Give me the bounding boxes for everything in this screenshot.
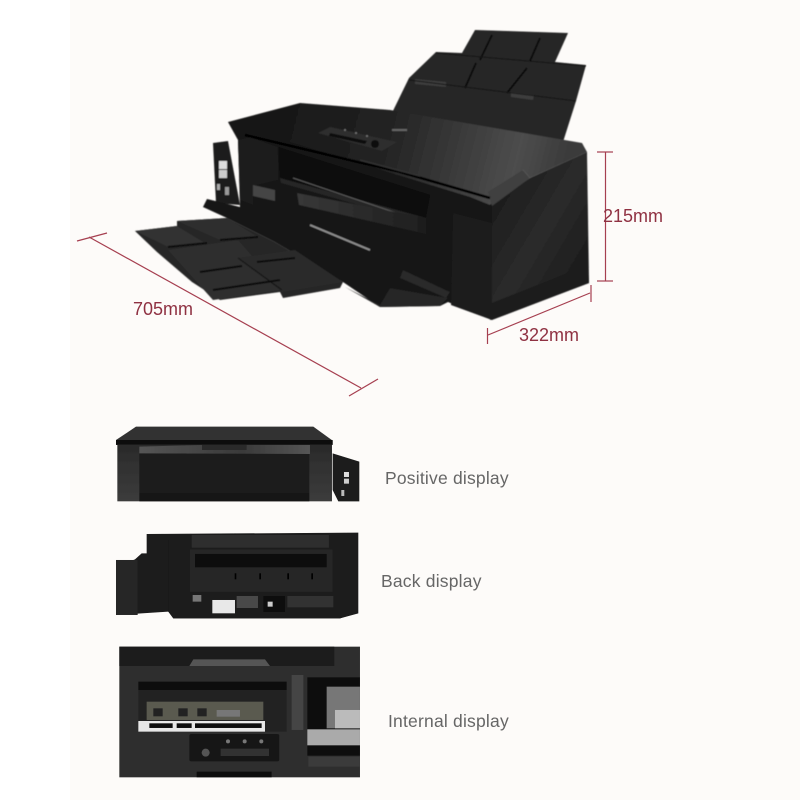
dimension: 322mm: 322mm [519, 325, 579, 345]
dimension: 215mm: 215mm [603, 206, 663, 226]
label: positive display: Positive display [385, 468, 509, 488]
dimension: 215mm [597, 152, 663, 281]
main printer illustration [135, 30, 589, 320]
back view photo [116, 533, 358, 618]
internal view photo [119, 647, 360, 777]
ink tank [213, 141, 240, 205]
printer top cover [228, 103, 587, 206]
label: back display: Back display [381, 571, 482, 591]
dimension: 705mm [77, 233, 378, 396]
printer right side [490, 152, 589, 320]
dimension: 705mm: 705mm [133, 299, 193, 319]
output tray [135, 218, 343, 300]
front view photo [116, 427, 359, 501]
printer front and base [203, 122, 492, 320]
label: internal display: Internal display [388, 711, 509, 731]
dimension: 322mm [488, 285, 591, 345]
control panel [318, 127, 407, 151]
rear paper support [390, 30, 586, 142]
